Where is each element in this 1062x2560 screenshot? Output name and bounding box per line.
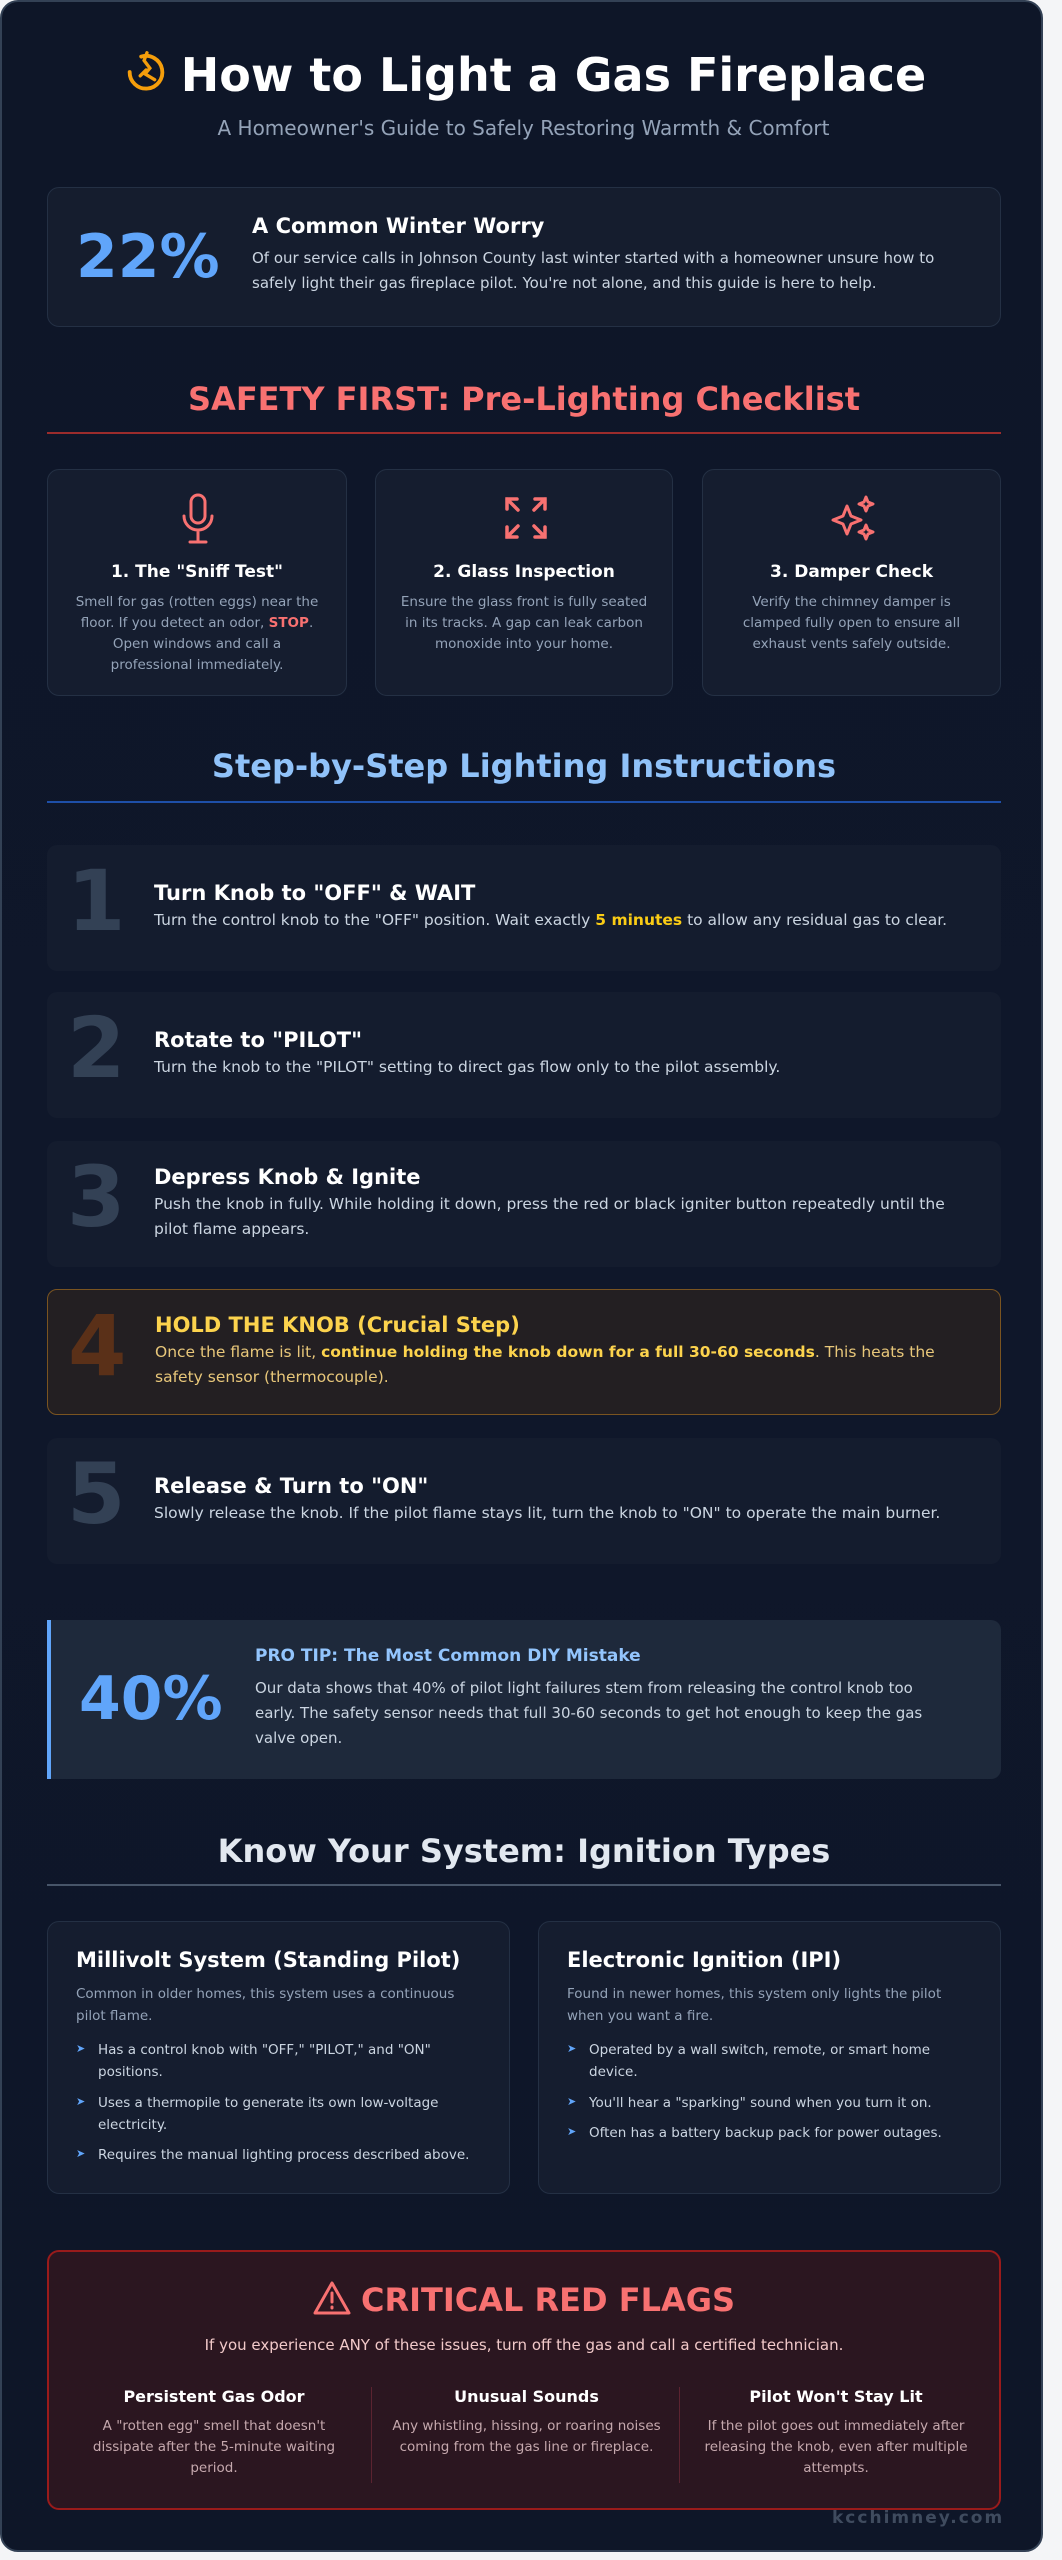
step 5 [47,1438,1001,1564]
stat callout: 22%: A Common Winter Worry [252,214,544,238]
stat callout: 22% [47,187,1001,327]
panel: millivolt: Requires the manual lighting process described above. [98,2147,469,2163]
panel: millivolt: Millivolt System (Standing Pilot) [76,1948,460,1972]
panel: electronic: Found in newer homes, this system only lights the pilot when you want a fire. [567,1986,941,2024]
panel: critical red flags: If you experience ANY of these issues, turn off the gas and call a certified technician. [205,2336,843,2354]
step 3 [47,1141,1001,1267]
step 3: Depress Knob & Ignite [154,1165,421,1189]
icon: expand arrows [505,497,547,539]
step 1: 1 [67,852,125,950]
pro tip callout: Our data shows that 40% of pilot light failures stem from releasing the control knob too early. The safety sensor needs that full 30-60 seconds to get hot enough to keep the gas valve open. [255,1679,922,1746]
flag: unusual sounds [392,2387,661,2455]
stat callout: 22%: Of our service calls in Johnson County last winter started with a homeowner unsure how to safely light their gas fireplace pilot. You're not alone, and this guide is here to help. [252,249,934,292]
step 1: Turn the control knob to the "OFF" position. Wait exactly 5 minutes to allow any residual gas to clear. [154,911,947,929]
icon: fire logo [128,51,164,90]
subtitle: A Homeowner's Guide to Safely Restoring Warmth & Comfort [217,116,830,140]
panel: sniff test: Smell for gas (rotten eggs) near the floor. If you detect an odor, STOP. Open windows and call a professional immediately. [76,594,318,673]
heading: ignition types: Know Your System: Ignition Types [218,1832,830,1870]
flag: gas odor: Persistent Gas Odor [123,2387,305,2406]
panel: electronic: You'll hear a "sparking" sound when you turn it on. [589,2095,932,2111]
flag: pilot won't stay lit [704,2387,968,2476]
pro tip callout: 40% [79,1664,223,1734]
flag: unusual sounds: Unusual Sounds [454,2387,599,2406]
panel: electronic: Often has a battery backup pack for power outages. [589,2125,942,2141]
panel: damper check [702,469,1001,696]
pro tip callout: PRO TIP: The Most Common DIY Mistake [255,1646,641,1666]
step 2: Turn the knob to the "PILOT" setting to direct gas flow only to the pilot assembly. [154,1058,780,1076]
panel: electronic [538,1921,1001,2194]
step 3: 3 [67,1148,125,1246]
step 2: Rotate to "PILOT" [154,1028,362,1052]
flag: pilot won't stay lit: Pilot Won't Stay Lit [749,2387,923,2406]
panel: damper check: 3. Damper Check [770,562,933,582]
panel: critical red flags [47,2250,1001,2510]
panel: damper check: Verify the chimney damper is clamped fully open to ensure all exhaust vents safely outside. [743,594,960,652]
flag: gas odor [93,2387,335,2476]
title: How to Light a Gas Fireplace [181,48,926,102]
step 3: Push the knob in fully. While holding it down, press the red or black igniter button repeatedly until the pilot flame appears. [154,1195,945,1238]
flag: unusual sounds: Any whistling, hissing, or roaring noises coming from the gas line or fireplace. [392,2418,661,2455]
step 4: crucial: HOLD THE KNOB (Crucial Step) [155,1313,520,1337]
icon: sparkles [831,496,874,540]
panel: millivolt [47,1921,510,2194]
step 1: Turn Knob to "OFF" & WAIT [154,881,475,905]
panel: millivolt: Common in older homes, this system uses a continuous pilot flame. [76,1986,454,2024]
step 5: Release & Turn to "ON" [154,1474,428,1498]
panel: millivolt: Uses a thermopile to generate its own low-voltage electricity. [98,2095,438,2133]
flag: gas odor: A "rotten egg" smell that doesn't dissipate after the 5-minute waiting period. [93,2418,335,2476]
stat callout: 22%: 22% [76,222,220,292]
footer: brand: kcchimney.com [832,2508,1004,2528]
step 4: crucial: 4 [68,1297,126,1395]
panel: sniff test: 1. The "Sniff Test" [111,562,283,582]
panel: glass inspection: Ensure the glass front is fully seated in its tracks. A gap can leak carbon monoxide into your home. [401,594,647,652]
step 5: Slowly release the knob. If the pilot flame stays lit, turn the knob to "ON" to operate the main burner. [154,1504,940,1522]
heading: step-by-step: Step-by-Step Lighting Instructions [212,747,836,785]
step 4: crucial: Once the flame is lit, continue holding the knob down for a full 30-60 seconds. This heats the safety sensor (thermocouple). [155,1343,935,1386]
panel: glass inspection: 2. Glass Inspection [433,562,615,582]
icon: microphone [182,494,214,544]
step 5: 5 [67,1445,125,1543]
panel: electronic: Operated by a wall switch, remote, or smart home device. [589,2042,930,2080]
heading: critical red flags: CRITICAL RED FLAGS [361,2281,735,2319]
step 1 [47,845,1001,971]
flag: pilot won't stay lit: If the pilot goes out immediately after releasing the knob, even after multiple attempts. [704,2418,968,2476]
panel: millivolt: Has a control knob with "OFF," "PILOT," and "ON" positions. [98,2042,431,2080]
panel: electronic: Electronic Ignition (IPI) [567,1948,841,1972]
step 4: crucial [47,1289,1001,1415]
step 2: 2 [67,999,125,1097]
icon: warning [314,2281,351,2314]
heading: safety first: SAFETY FIRST: Pre-Lighting Checklist [188,380,860,418]
panel: glass inspection [375,469,673,696]
step 2 [47,992,1001,1118]
panel: sniff test [47,469,347,696]
pro tip callout [47,1620,1001,1779]
